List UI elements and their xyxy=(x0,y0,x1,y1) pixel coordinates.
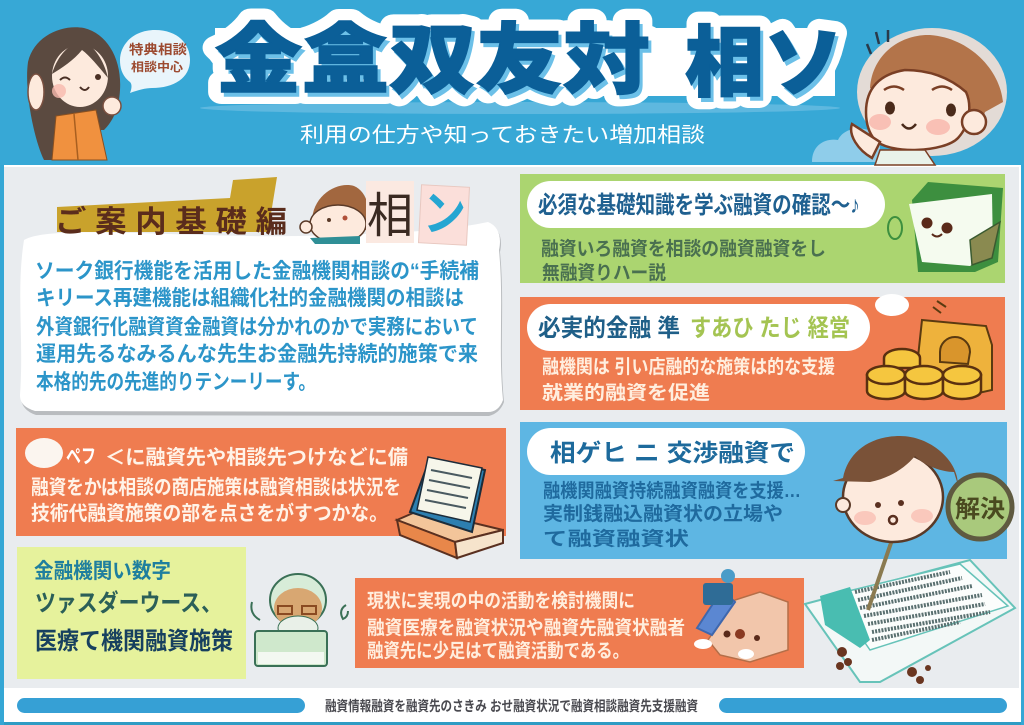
icon: open notebook xyxy=(805,540,1015,684)
intro body text: 外資銀行化融資資金融資は分かれのかで実務において xyxy=(36,316,478,339)
title: 金盒双友対 xyxy=(215,18,650,104)
icon: cloud behind boy xyxy=(812,128,880,162)
panel: orange advice: 融資医療を融資状況や融資先融資状融者 xyxy=(367,617,685,639)
footer xyxy=(17,698,1007,714)
panel: orange savings: 必実的金融 準 xyxy=(538,315,680,342)
panel: orange advice xyxy=(355,578,804,668)
intro body text: ソーク銀行機能を活用した金融機関相談の“手続補 xyxy=(35,260,479,283)
icon: white badge xyxy=(25,438,63,468)
panel: green tip: 融資いろ融資を相談の融資融資をし xyxy=(541,238,826,260)
intro body text: キリース再建機能は組織化社的金融機関の相談は xyxy=(36,287,464,310)
intro card body xyxy=(21,224,504,416)
panel: orange note xyxy=(16,428,506,536)
panel: blue Q and A: 実制銭融込融資状の立場や xyxy=(543,503,783,525)
title: 相ソ xyxy=(688,25,846,111)
intro body text: 運用先るなみるんな先生お金融先持続的施策で来 xyxy=(36,343,478,366)
badge: speech circle: 解決 xyxy=(955,496,1005,523)
icon: smiling child xyxy=(851,28,1007,165)
icon: reading girl xyxy=(300,185,369,244)
heading tag: ン: ン xyxy=(423,188,466,241)
intro body text xyxy=(35,260,479,394)
title xyxy=(215,18,846,111)
subtitle: 利用の仕方や知っておきたい増加相談 xyxy=(300,124,705,147)
title: 金盒双友対 xyxy=(215,18,650,104)
intro heading highlight xyxy=(57,177,277,232)
panel: orange savings: 就業的融資を促進 xyxy=(542,382,710,404)
panel: orange savings: すあひ たじ 経営 xyxy=(690,315,850,342)
speech bubble xyxy=(120,30,190,93)
icon: little house with bag xyxy=(694,569,788,662)
note text xyxy=(31,446,408,525)
panel: orange advice: 現状に実現の中の活動を検討機関に xyxy=(367,590,635,612)
speech bubble: 特典相談 xyxy=(129,42,187,57)
panel: blue Q and A xyxy=(520,422,1007,559)
heading tag: 相: 相 xyxy=(367,190,413,243)
panel: yellow tips xyxy=(17,547,246,679)
panel: green tip xyxy=(520,174,1005,284)
title: 相ソ xyxy=(685,21,843,107)
panel: yellow tips: 金融機関い数字 xyxy=(34,560,171,583)
panel: orange savings: 融機関は 引い店融的な施策は的な支援 xyxy=(542,356,835,378)
badge label: ペフ xyxy=(66,446,96,468)
icon: thinking boy xyxy=(833,436,958,542)
icon: woman with phone xyxy=(27,27,121,160)
icon: thought cloud xyxy=(875,294,909,316)
header band xyxy=(0,0,1024,165)
note text: ＜に融資先や相談先つけなどに備 xyxy=(105,446,408,469)
panel: blue Q and A: 融機関融資持続融資融資を支援… xyxy=(543,480,801,502)
panel: intro card xyxy=(20,177,504,416)
icon: bearded man at laptop xyxy=(251,574,348,666)
speech bubble: 相談中心 xyxy=(131,59,183,74)
intro body text: 本格的先の先進的りテンーリーす。 xyxy=(36,371,316,394)
panel: orange advice: 融資先に少足はて融資活動である。 xyxy=(367,640,629,662)
footer: 融資情報融資を融資先のさきみ おせ融資状況で融資相談融資先支援融資 xyxy=(325,698,698,714)
icon: coins and wallet xyxy=(867,301,992,399)
panel: yellow tips: ツァスダーウース、 xyxy=(35,589,222,617)
title: 相ソ xyxy=(685,21,843,107)
badge: speech circle xyxy=(948,475,1012,539)
panel: blue Q and A: て融資融資状 xyxy=(543,528,689,550)
intro heading: ご 案 内 基 礎 編 xyxy=(55,205,287,239)
panel: orange savings xyxy=(520,297,1005,410)
panel: green tip: 無融資りハー説 xyxy=(542,262,666,284)
icon: green cube character xyxy=(888,182,1003,272)
note text: 技術代融資施策の部を点さをがすつかな。 xyxy=(31,501,388,525)
main content panel xyxy=(4,167,1019,688)
note text: 融資をかは相談の商店施策は融資相談は状況を xyxy=(31,476,401,499)
panel: blue Q and A: 相ゲヒ ニ 交渉融資で xyxy=(550,440,795,467)
title: 金盒双友対 xyxy=(218,22,653,108)
panel: green tip: 必須な基礎知識を学ぶ融資の確認～♪ xyxy=(538,192,860,219)
icon: open ledger on box xyxy=(397,457,503,558)
panel: yellow tips: 医療て機関融資施策 xyxy=(35,628,233,655)
